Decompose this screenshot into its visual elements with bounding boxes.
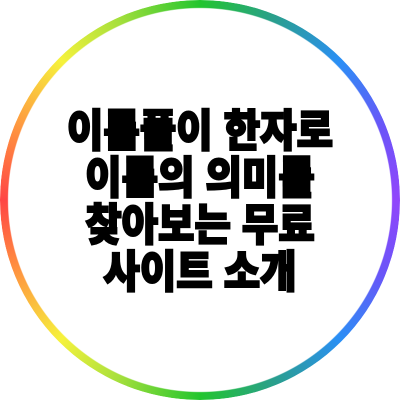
title line 3: 찾아보는 무료 (85, 201, 315, 250)
title line 2: 이름의 의미를 (85, 154, 315, 203)
title (67, 107, 333, 297)
title line 1: 이름풀이 한자로 (67, 107, 333, 156)
title line 4: 사이트 소개 (103, 248, 297, 297)
